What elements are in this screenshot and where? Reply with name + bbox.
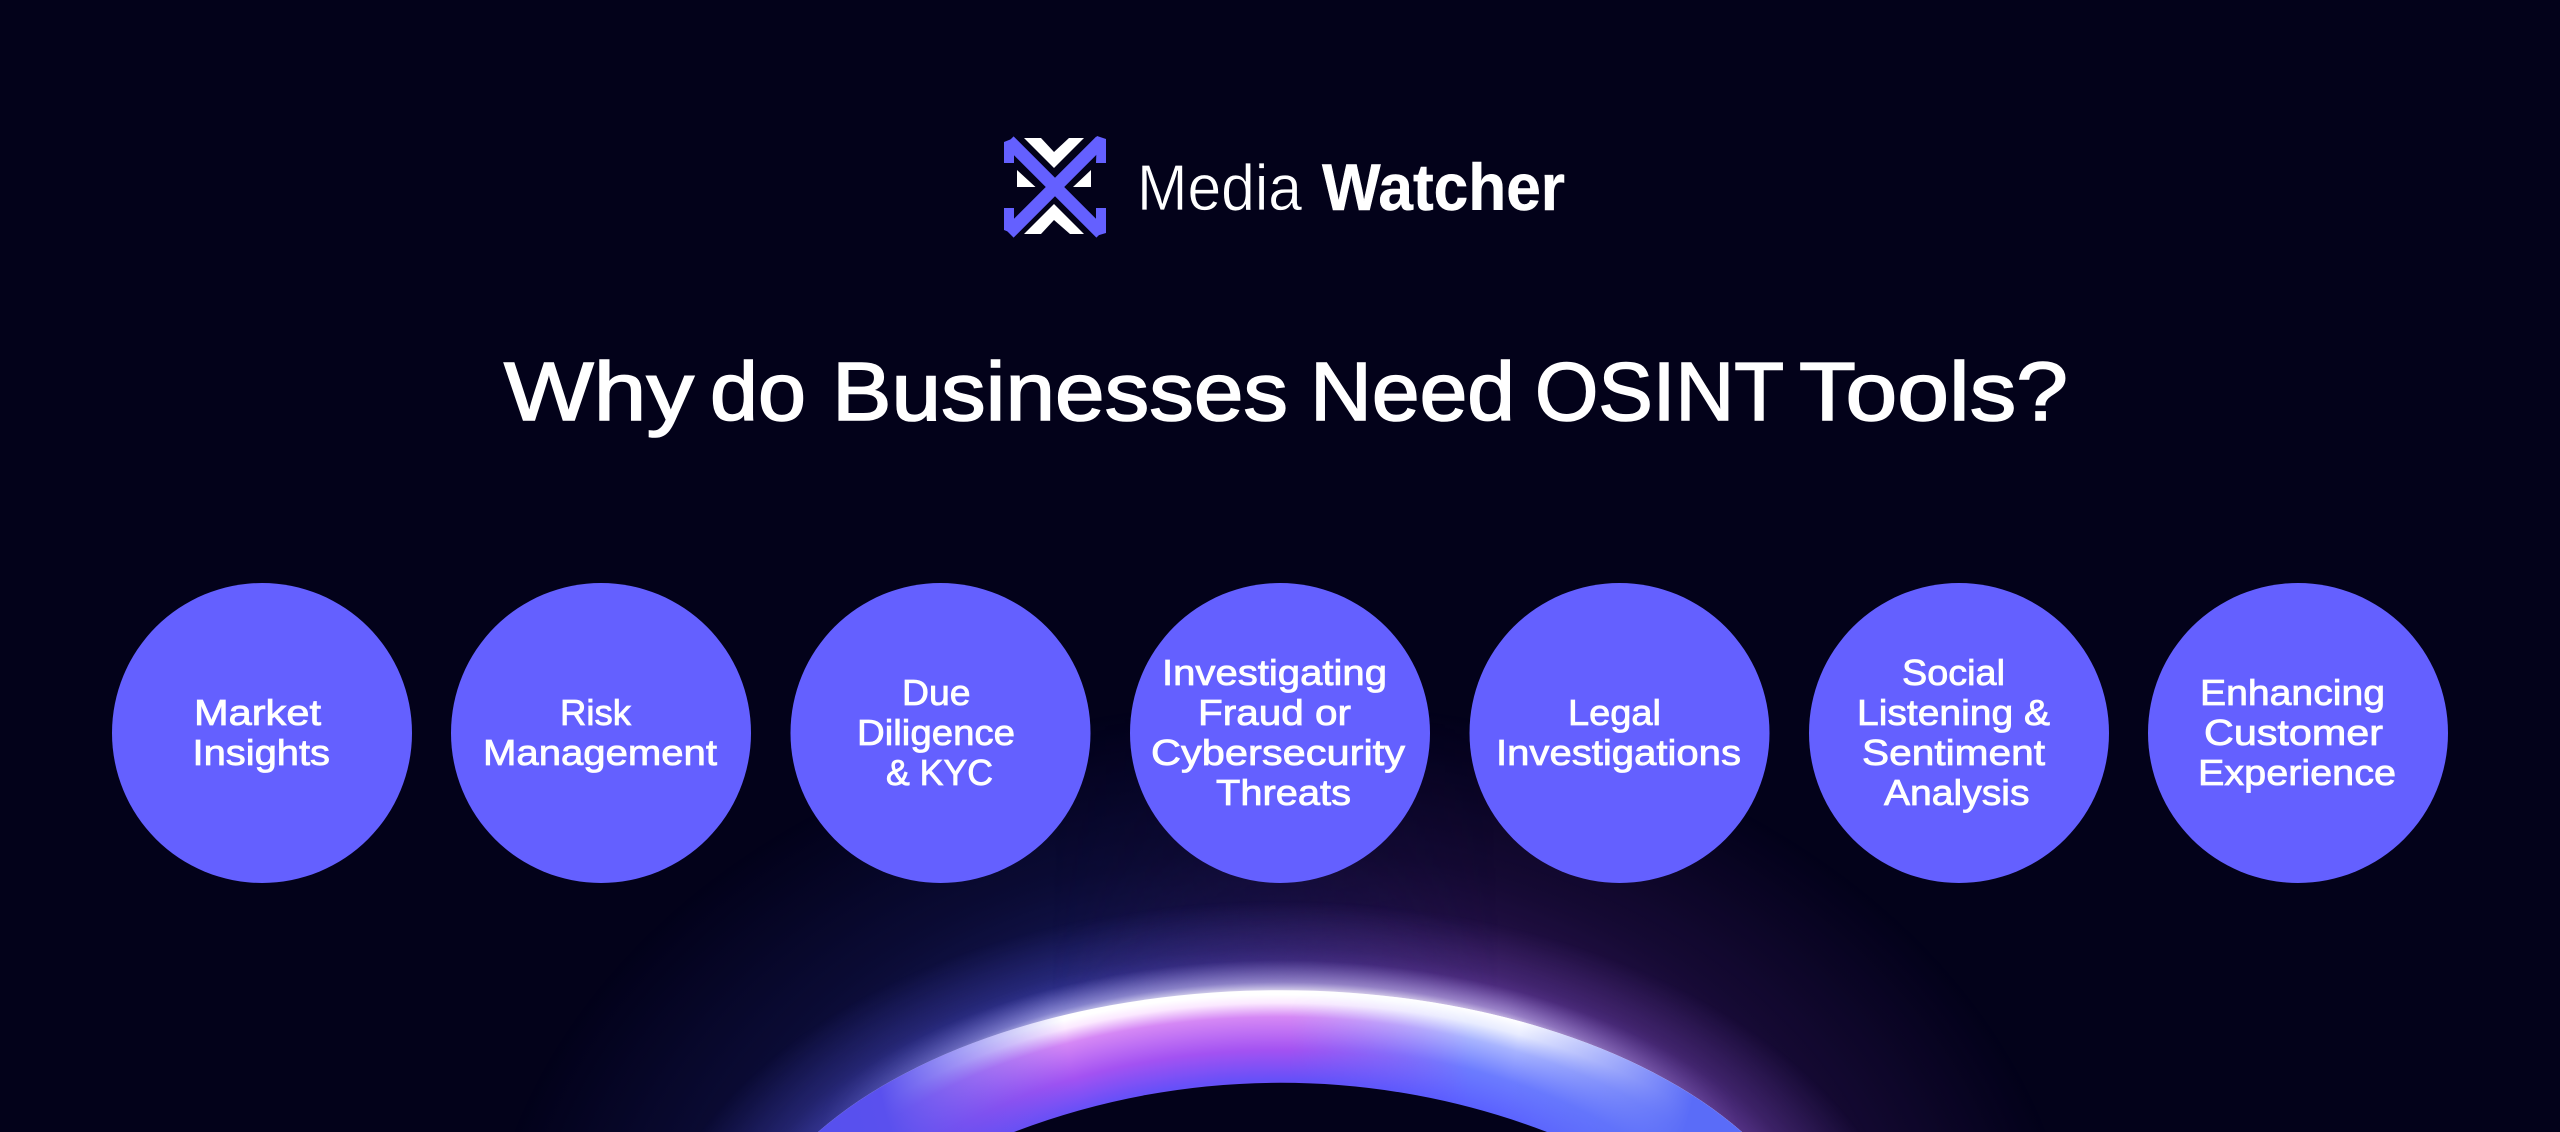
logo wordmark: Watcher bbox=[1322, 150, 1565, 224]
circle: Risk Management bbox=[451, 583, 751, 883]
title: Why bbox=[504, 345, 695, 438]
logo icon bbox=[1004, 136, 1106, 236]
title: OSINT bbox=[1535, 345, 1784, 438]
planet glow arc bbox=[580, 763, 1978, 1132]
circle: Due Diligence & KYC: Diligence bbox=[857, 712, 1015, 753]
circle: Investigating Fraud or Cybersecurity Threats: Fraud or bbox=[1198, 692, 1351, 733]
circle: Enhancing Customer Experience: Customer bbox=[2204, 712, 2383, 753]
circle: Enhancing Customer Experience bbox=[2148, 583, 2448, 883]
title: do bbox=[710, 345, 806, 438]
circle: Social Listening & Sentiment Analysis bbox=[1809, 583, 2109, 883]
circle: Investigating Fraud or Cybersecurity Threats: Cybersecurity bbox=[1151, 732, 1405, 773]
circle: Market Insights bbox=[112, 583, 412, 883]
circle: Risk Management: Risk bbox=[560, 692, 632, 733]
circle: Due Diligence & KYC: Due bbox=[902, 672, 970, 713]
title: Need bbox=[1310, 345, 1515, 438]
title bbox=[504, 345, 2068, 438]
circle: Social Listening & Sentiment Analysis: Analysis bbox=[1884, 772, 2030, 813]
circle: Investigating Fraud or Cybersecurity Threats: Investigating bbox=[1162, 652, 1387, 693]
circle: Enhancing Customer Experience: Experience bbox=[2198, 752, 2396, 793]
circle: Social Listening & Sentiment Analysis: Sentiment bbox=[1862, 732, 2045, 773]
logo wordmark bbox=[1137, 150, 1565, 224]
logo bbox=[1004, 136, 1565, 236]
circle: Investigating Fraud or Cybersecurity Threats: Threats bbox=[1216, 772, 1351, 813]
circle: Social Listening & Sentiment Analysis: Listening & bbox=[1857, 692, 2050, 733]
title: Tools? bbox=[1799, 345, 2068, 438]
circle: Market Insights: Market bbox=[194, 692, 321, 733]
circle: Investigating Fraud or Cybersecurity Threats bbox=[1130, 583, 1430, 883]
circle: Legal Investigations bbox=[1470, 583, 1770, 883]
circle: Market Insights: Insights bbox=[192, 732, 330, 773]
circle: Legal Investigations: Investigations bbox=[1496, 732, 1741, 773]
logo wordmark: Media bbox=[1137, 151, 1303, 224]
circle: Enhancing Customer Experience: Enhancing bbox=[2200, 672, 2385, 713]
circle: Social Listening & Sentiment Analysis: Social bbox=[1902, 652, 2005, 693]
title: Businesses bbox=[832, 345, 1288, 438]
circle: Due Diligence & KYC bbox=[790, 583, 1090, 883]
circle: Risk Management: Management bbox=[483, 732, 717, 773]
circle: Legal Investigations: Legal bbox=[1568, 692, 1661, 733]
circle: Due Diligence & KYC: & KYC bbox=[886, 752, 993, 793]
